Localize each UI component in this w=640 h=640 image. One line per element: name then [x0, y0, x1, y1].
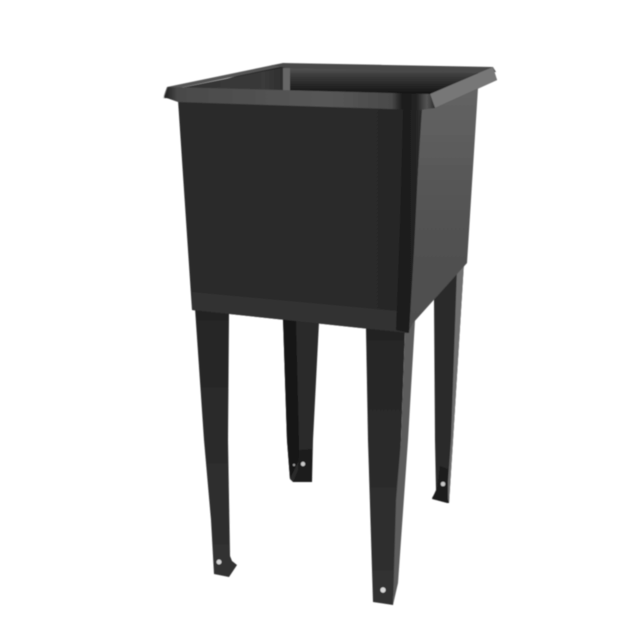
tub and legs: [163, 63, 497, 605]
tub interior: [163, 65, 497, 108]
tub rim: [163, 63, 497, 110]
leg: back right: [432, 262, 464, 503]
tub front wall: [178, 100, 422, 333]
leg: front right: [366, 320, 415, 605]
leg: front left: [195, 308, 237, 577]
tub side wall: [408, 88, 478, 333]
leg: back centre: [283, 318, 319, 482]
front corner shadow strip: [396, 106, 421, 333]
